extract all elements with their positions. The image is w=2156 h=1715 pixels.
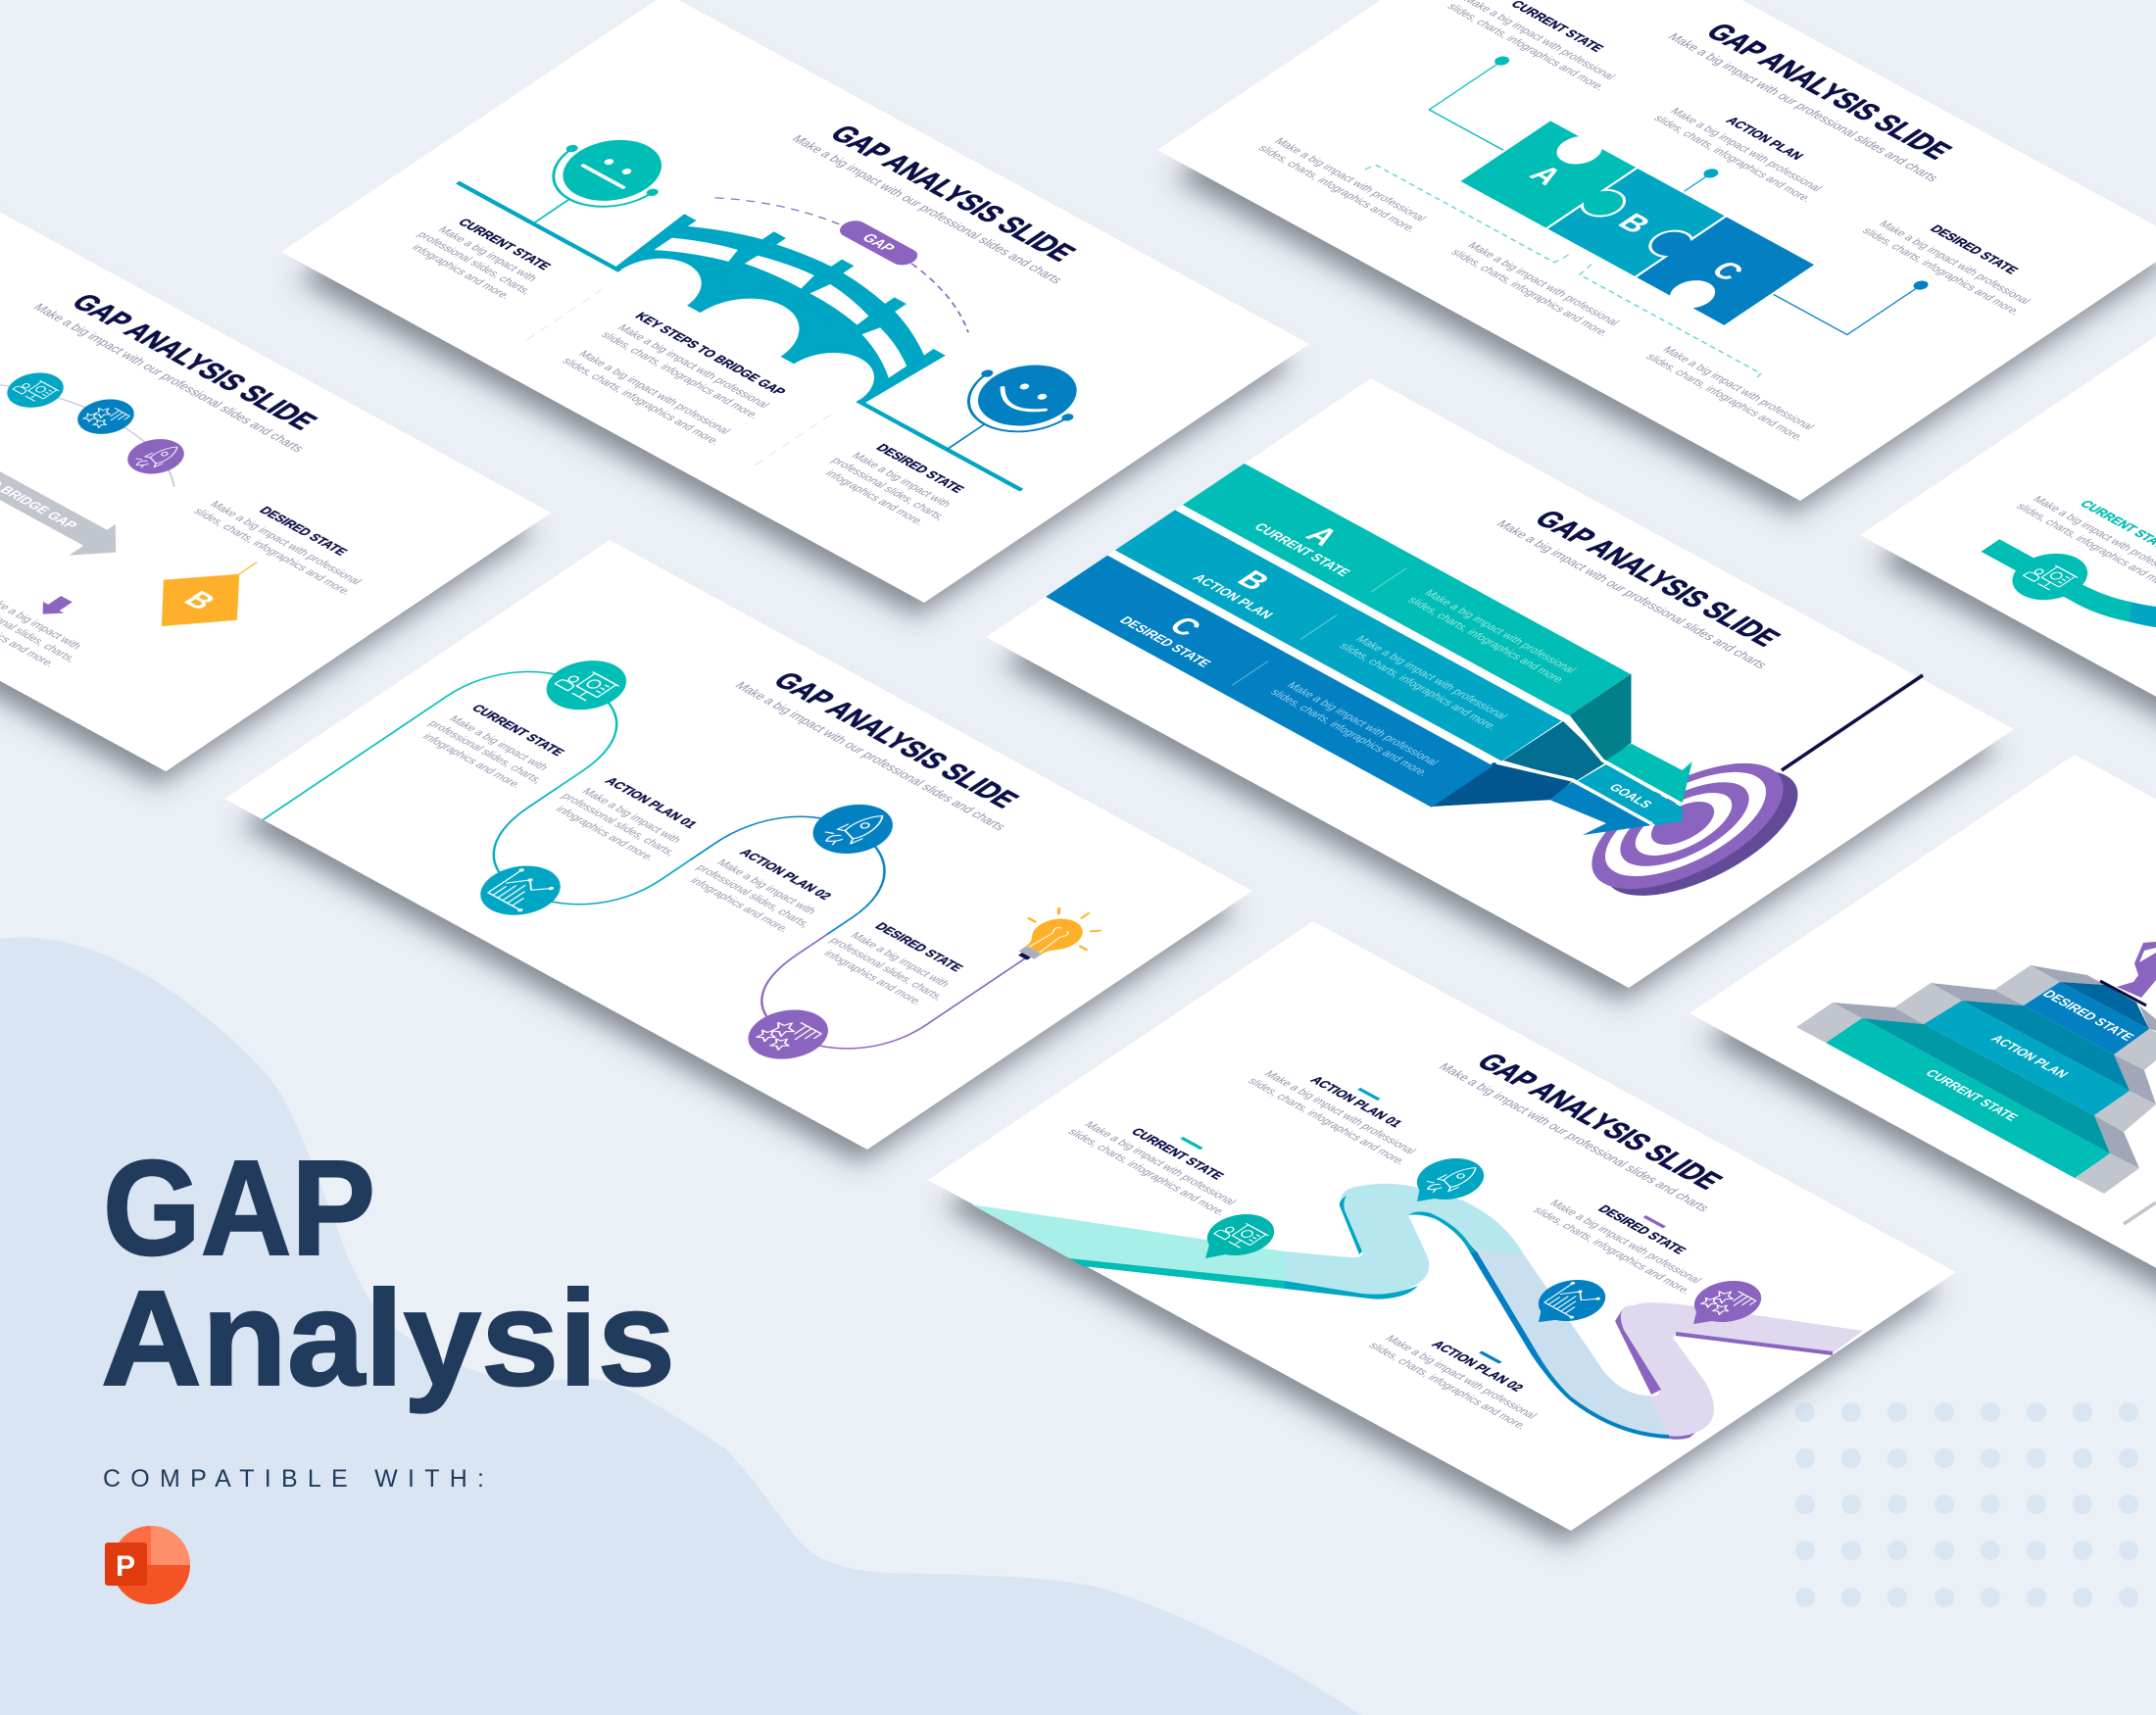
text: action plan: slides, charts, infographics and more. xyxy=(1650,114,1814,204)
left ground line xyxy=(458,182,619,270)
text: desired state: slides, charts, infographics and more. xyxy=(190,507,354,598)
right ground line xyxy=(858,401,1021,490)
text: key steps to bridge gap: slides, charts, infographics and more. xyxy=(598,330,761,420)
slide subtitle: Make a big impact with our professional slides and charts xyxy=(30,301,308,454)
dot grid decoration xyxy=(1795,1402,2138,1607)
road slide text: DESIRED STATE xyxy=(1594,1202,1690,1256)
slide title: GAP ANALYSIS SLIDE xyxy=(765,667,1025,813)
panel: bridge slide xyxy=(281,0,1309,603)
icon: rocket circle xyxy=(797,795,909,863)
text: current state: slides, charts, infographics and more. xyxy=(1445,2,1607,92)
icon: happy face xyxy=(903,347,1107,473)
winding path xyxy=(263,647,1054,1111)
slide title: GAP ANALYSIS SLIDE xyxy=(822,121,1082,267)
text: desired state: DESIRED STATE xyxy=(256,504,352,558)
slide title: GAP ANALYSIS SLIDE xyxy=(1698,19,1958,165)
text: current state: infographics and more. xyxy=(419,732,524,790)
road slide text: slides, charts, infographics and more. xyxy=(1065,1127,1228,1218)
text: action plan 01: Make a big impact with xyxy=(579,787,683,845)
funnel bands and labels: slides, charts, infographics and more. xyxy=(1337,642,1499,732)
connector: C xyxy=(1773,241,1930,337)
text: lower descriptions: Make a big impact with professional xyxy=(1272,136,1428,223)
text: current state: infographics and more. xyxy=(409,243,513,301)
icon: PowerPoint logo: P xyxy=(116,1550,135,1583)
road slide text: slides, charts, infographics and more. xyxy=(1530,1205,1693,1297)
coloured step faces xyxy=(1826,982,2149,1178)
icon: trophy xyxy=(2100,942,2156,1005)
text: key steps to bridge gap: Make a big impact with professional xyxy=(575,350,732,436)
text: desired state: Make a big impact with xyxy=(848,931,952,989)
text: desired state: professional slides, charts, xyxy=(826,936,946,1003)
text: lower descriptions: slides, charts, infographics and more. xyxy=(1642,352,1806,443)
text: lower descriptions: slides, charts, infographics and more. xyxy=(1448,248,1611,338)
text: lower descriptions xyxy=(1255,133,1820,445)
puzzle letters: A xyxy=(1522,160,1570,190)
step labels: CURRENT STATE xyxy=(1923,1067,2022,1123)
orange diamond B: B xyxy=(176,586,222,614)
text: lower descriptions: Make a big impact with professional xyxy=(1464,241,1621,327)
slide subtitle: Make a big impact with our professional slides and charts xyxy=(789,132,1066,285)
text: desired state xyxy=(815,434,980,531)
gap pill: GAP xyxy=(858,231,899,255)
puzzle letters xyxy=(1522,158,1751,287)
road slide text: Make a big impact with professional xyxy=(1082,1120,1238,1207)
icon: chart circle xyxy=(464,856,577,925)
funnel bands and labels: CURRENT STATE xyxy=(1250,520,1353,578)
step labels: ACTION PLAN xyxy=(1987,1033,2072,1080)
funnel bands and labels: Make a big impact with professional xyxy=(1421,588,1578,675)
funnel bands and labels: A xyxy=(1298,520,1347,551)
text: action plan 01 xyxy=(545,768,711,867)
main title: GAP: GAP xyxy=(103,1133,375,1284)
text: action plan: Make a big impact with professional xyxy=(1667,107,1824,193)
text: desired state: Make a big impact with professional xyxy=(1876,220,2033,306)
main title: Analysis: Analysis xyxy=(101,1263,675,1414)
text: desired state xyxy=(813,913,980,1011)
funnel bands and labels: C xyxy=(1161,612,1209,642)
road slide text: Make a big impact with professional xyxy=(1261,1069,1418,1156)
text: current state xyxy=(413,696,579,795)
compatible with label: COMPATIBLE WITH: xyxy=(103,1465,484,1493)
road slide text: ACTION PLAN 02 xyxy=(1429,1338,1527,1394)
funnel bands and labels: slides, charts, infographics and more. xyxy=(1404,596,1568,686)
text: key steps to bridge gap xyxy=(560,308,795,447)
funnel bands and labels: DESIRED STATE xyxy=(1116,614,1214,669)
icon: presentation circle xyxy=(530,651,643,719)
text: action plan 02: ACTION PLAN 02 xyxy=(736,847,835,902)
text: action plan 02: Make a big impact with xyxy=(713,858,818,916)
funnel bands and labels: B xyxy=(1230,565,1278,596)
text: current state: Make a big impact with xyxy=(446,714,551,772)
road surface xyxy=(971,1184,1863,1437)
funnel bands and labels: Make a big impact with professional xyxy=(1284,681,1441,767)
road slide text: slides, charts, infographics and more. xyxy=(1245,1076,1408,1167)
road slide text: GAP ANALYSIS SLIDE xyxy=(1469,1049,1729,1195)
pin: stars xyxy=(1681,1273,1775,1330)
gap pill xyxy=(834,218,923,269)
icon: presentation circle xyxy=(0,366,75,415)
text: current state: professional slides, charts, xyxy=(425,719,545,785)
puzzle piece B xyxy=(1545,168,1727,277)
panel: right timeline slide xyxy=(1860,276,2156,886)
text: action plan: ACTION PLAN xyxy=(1723,115,1807,162)
road slide text: Make a big impact with our professional slides and charts xyxy=(1436,1060,1713,1213)
road slide text xyxy=(1024,956,1824,1432)
funnel bands and labels xyxy=(1046,464,1749,872)
icon: light bulb xyxy=(994,898,1117,973)
slide subtitle: Make a big impact with our professional slides and charts xyxy=(732,679,1009,832)
text: action plan 01: ACTION PLAN 01 xyxy=(602,775,701,830)
text: key steps to bridge gap: KEY STEPS TO BRIDGE GAP xyxy=(632,310,790,398)
arc connector xyxy=(0,348,201,503)
text: desired state: DESIRED STATE xyxy=(871,920,967,974)
panel: funnel and target slide xyxy=(986,378,2014,988)
text: desired state: Make a big impact with professional xyxy=(207,500,364,587)
purple down arrow xyxy=(32,593,76,620)
text: current state: professional slides, charts, xyxy=(415,230,534,296)
left grey steps xyxy=(1796,965,2105,1043)
text: desired state: Make a big impact with xyxy=(849,451,954,510)
step labels: DESIRED STATE xyxy=(2039,988,2137,1043)
text: current state xyxy=(401,210,564,306)
text: key steps to bridge gap: Make a big impact with professional xyxy=(614,323,771,410)
pin: chart xyxy=(1525,1272,1619,1329)
text: desired state: professional slides, charts, xyxy=(828,456,948,522)
icon: neutral face xyxy=(489,122,693,248)
background blob xyxy=(0,938,1361,1715)
text: desired state: DESIRED STATE xyxy=(1927,222,2022,276)
text: desired state: DESIRED STATE xyxy=(873,442,968,495)
pin: presentation xyxy=(1194,1206,1288,1263)
panel: step pyramid slide xyxy=(1690,755,2156,1364)
step labels xyxy=(1922,988,2139,1123)
text: desired state xyxy=(1859,203,2057,317)
text: current state: CURRENT STATE xyxy=(455,217,555,272)
funnel bands and labels: Make a big impact with professional xyxy=(1352,634,1509,721)
text: desired state xyxy=(190,485,386,598)
icon: stars circle xyxy=(66,392,146,441)
icon: rocket circle xyxy=(116,432,196,481)
text: key steps to bridge gap: slides, charts, infographics and more. xyxy=(560,357,722,447)
orange diamond B xyxy=(124,542,294,646)
text: lower descriptions: Make a big impact with professional xyxy=(1659,345,1816,432)
timeline band xyxy=(1981,529,2156,638)
text: action plan 02: professional slides, charts, xyxy=(693,863,812,929)
panel: left arrow slide xyxy=(0,162,551,771)
text: action plan xyxy=(1650,91,1847,204)
pin: rocket xyxy=(1403,1151,1497,1207)
funnel bands and labels: slides, charts, infographics and more. xyxy=(1267,688,1431,778)
text: current state: CURRENT STATE xyxy=(468,703,568,759)
dashed brackets xyxy=(1365,154,1777,381)
text: action plan 01: infographics and more. xyxy=(553,805,657,863)
connector: B xyxy=(1679,168,1720,194)
dashed gap arc xyxy=(715,173,1002,334)
right grey steps xyxy=(2075,1005,2156,1194)
text: desired state: slides, charts, infographics and more. xyxy=(1859,226,2023,317)
road slide text: CURRENT STATE xyxy=(1128,1126,1228,1182)
panel: puzzle slide xyxy=(1157,0,2156,501)
panel: winding path slide xyxy=(224,540,1252,1150)
road edges xyxy=(1069,1196,1833,1440)
road slide text: Make a big impact with professional xyxy=(1546,1199,1703,1286)
puzzle piece A xyxy=(1458,120,1663,243)
panel: road slide xyxy=(928,921,1956,1531)
slide title: GAP ANALYSIS SLIDE xyxy=(64,289,323,435)
icon: PowerPoint logo xyxy=(105,1526,190,1604)
icon: target xyxy=(1573,738,1816,921)
road slide text: slides, charts, infographics and more. xyxy=(1366,1341,1529,1432)
text: current state: Make a big impact with xyxy=(435,225,539,283)
puzzle letters: B xyxy=(1610,208,1658,238)
text: action plan 01: professional slides, charts, xyxy=(559,792,677,858)
puzzle piece C xyxy=(1613,204,1816,326)
text: action plan 02: infographics and more. xyxy=(687,876,792,934)
road slide text: ACTION PLAN 01 xyxy=(1307,1074,1405,1129)
connector: A xyxy=(1425,55,1582,151)
puzzle letters: C xyxy=(1703,256,1751,286)
slide subtitle: Make a big impact with our professional slides and charts xyxy=(1665,30,1942,183)
funnel bands and labels: GOALS xyxy=(1606,781,1656,810)
text: desired state: infographics and more. xyxy=(820,949,925,1007)
icon: presentation node xyxy=(1997,544,2103,610)
text: desired state: infographics and more. xyxy=(822,468,927,527)
slide heading: Make a big impact with our professional slides and charts xyxy=(1494,517,1771,670)
icon: stars circle xyxy=(732,1000,845,1069)
icon: bridge xyxy=(609,191,978,407)
road slide text: Make a big impact with professional xyxy=(1383,1334,1539,1421)
grey arrow xyxy=(0,365,139,568)
text: lower descriptions: slides, charts, infographics and more. xyxy=(1255,144,1418,234)
funnel bands and labels: ACTION PLAN xyxy=(1190,571,1277,620)
text: action plan 02 xyxy=(680,840,847,939)
slide heading: GAP ANALYSIS SLIDE xyxy=(1527,506,1787,652)
target stick xyxy=(1782,675,1923,770)
funnel 3D sides and arrows xyxy=(1432,674,1692,835)
